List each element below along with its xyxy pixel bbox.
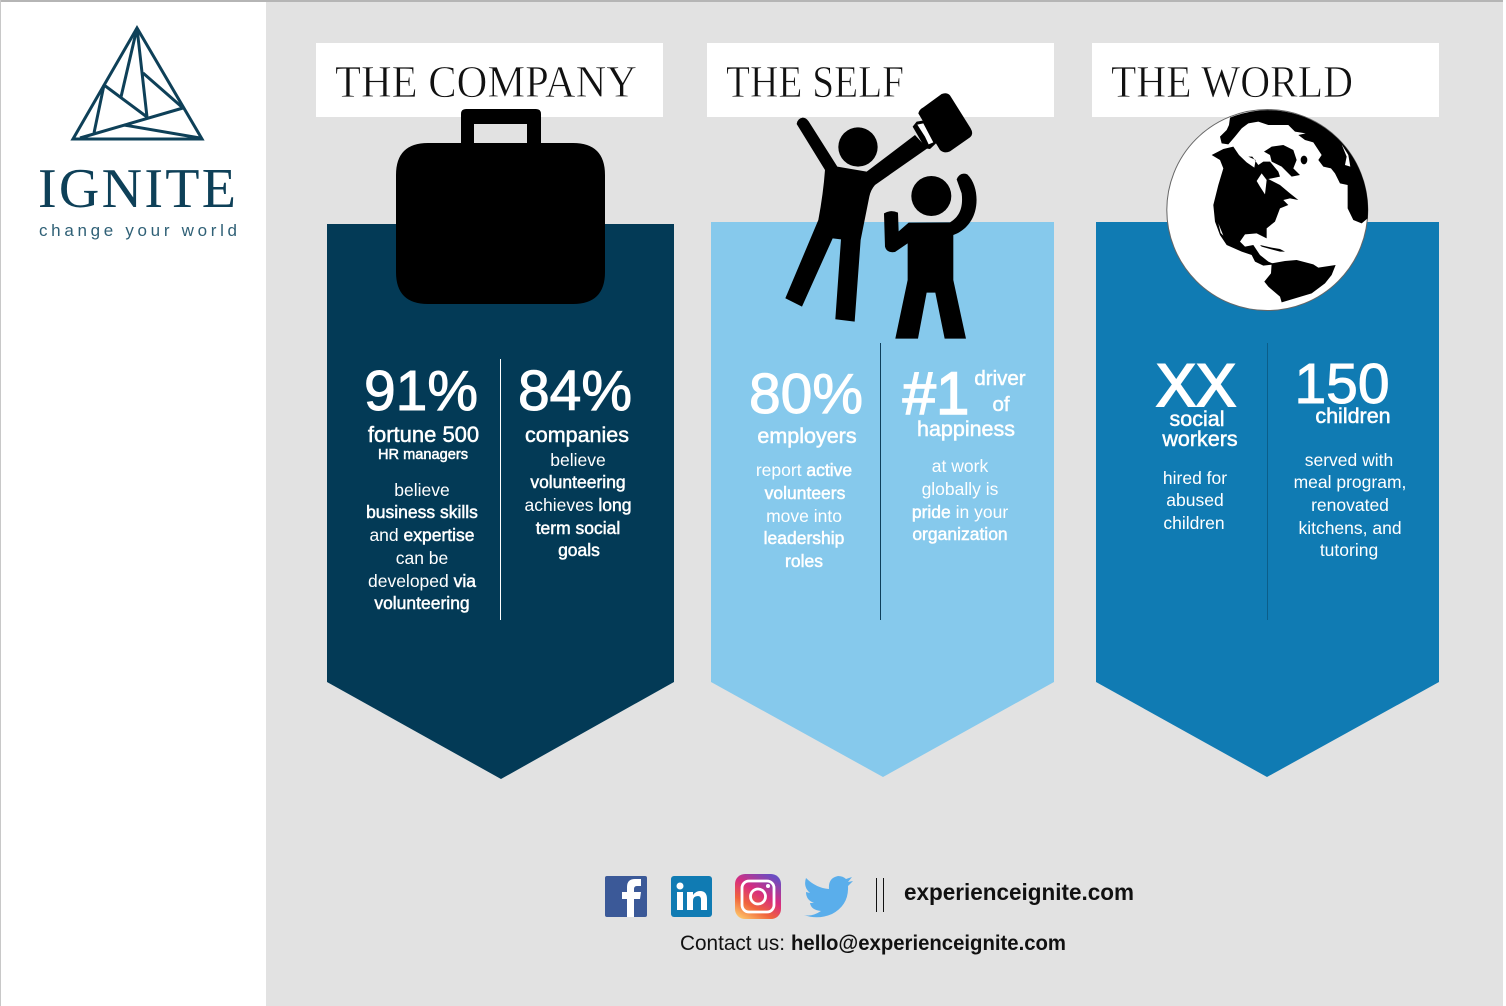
stat: 91% [364, 359, 479, 613]
stat: #1 driver of happiness: #1 [903, 360, 969, 427]
stat: 80%: roles [785, 551, 823, 571]
stat: XX: hired for [1163, 468, 1227, 488]
panel: the world [1092, 43, 1439, 777]
chevron background [711, 222, 1054, 777]
stat: 91%: HR managers [378, 447, 468, 463]
stat: 80%: volunteers [765, 483, 846, 503]
footer: social links and contact [605, 874, 1134, 955]
stat: 84%: goals [558, 540, 600, 560]
stat: 91%: and expertise [369, 525, 475, 545]
stat: 80%: employers [757, 424, 857, 448]
stat: XX: social [1170, 407, 1224, 431]
stat: XX: XX [1156, 352, 1236, 419]
stat: 80%: leadership [764, 528, 844, 548]
stat: 150: tutoring [1320, 540, 1378, 560]
heading: THE COMPANY [335, 57, 637, 107]
stat: XX: children [1163, 513, 1225, 533]
stat: 84%: companies [525, 423, 629, 447]
stat: 91%: 91% [364, 359, 478, 423]
stat: 91%: volunteering [374, 593, 470, 613]
stat: 80%: report active [756, 460, 852, 480]
heading: THE SELF [726, 57, 904, 107]
heading box [316, 43, 663, 117]
stat: 91%: business skills [366, 502, 478, 522]
stat: 91%: can be [396, 548, 448, 568]
stat: 84%: believe [550, 450, 606, 470]
panel: the company [316, 43, 674, 779]
chevron background [327, 224, 674, 779]
stat: 84%: volunteering [530, 472, 626, 492]
icon: twitter [804, 876, 853, 917]
icon: facebook [605, 876, 647, 917]
stat: XX [1156, 352, 1238, 533]
icon: faceted triangle [73, 28, 202, 139]
stat: XX: workers [1161, 427, 1238, 451]
stat: 80%: 80% [749, 362, 863, 426]
logo tagline: change your world [39, 221, 237, 240]
chevron background [1096, 222, 1439, 777]
heading box [1092, 43, 1439, 117]
stat: 150: served with [1305, 450, 1393, 470]
stat: 150: renovated [1311, 495, 1389, 515]
stat: 150: 150 [1294, 352, 1390, 416]
stat: 150 [1294, 352, 1406, 560]
stat: #1 driver of happiness: at work [932, 456, 988, 476]
stat: #1 driver of happiness [903, 360, 1026, 544]
logo: Ignite [38, 28, 237, 240]
logo wordmark: IGNITE [38, 158, 236, 220]
contact: Contact us: [680, 932, 785, 955]
stat: 91%: fortune 500 [368, 422, 479, 447]
stat: #1 driver of happiness: of [992, 393, 1010, 416]
icon: instagram [735, 874, 781, 919]
panel: the self [707, 43, 1054, 777]
stat: 84%: term social [536, 518, 620, 538]
stat: 150: kitchens, and [1298, 518, 1402, 538]
separator [876, 878, 884, 912]
contact [680, 932, 1066, 955]
stat: 150: meal program, [1294, 472, 1406, 492]
divider [1267, 343, 1268, 620]
stat: 84% [518, 359, 632, 560]
divider [880, 343, 881, 620]
stat: 80% [749, 362, 863, 571]
contact: hello@experienceignite.com [791, 932, 1066, 955]
heading: THE WORLD [1111, 57, 1353, 107]
stat: #1 driver of happiness: globally is [922, 479, 999, 499]
stat: #1 driver of happiness: happiness [917, 417, 1015, 441]
stat: #1 driver of happiness: pride in your [912, 502, 1008, 522]
icon: two people with briefcase [785, 93, 977, 339]
stat: #1 driver of happiness: driver [974, 367, 1026, 390]
stat: #1 driver of happiness: organization [912, 524, 1008, 544]
icon: briefcase [396, 109, 605, 304]
stat: 91%: developed via [368, 571, 476, 591]
heading box [707, 43, 1054, 117]
website: experienceignite.com [904, 879, 1134, 905]
stat: 84%: achieves long [524, 495, 632, 515]
divider [500, 359, 501, 620]
icon: linkedin [671, 876, 712, 917]
stat: 84%: 84% [518, 359, 632, 423]
stat: 91%: believe [394, 480, 450, 500]
stat: 150: children [1315, 404, 1391, 428]
stat: 80%: move into [766, 506, 842, 526]
stat: XX: abused [1166, 490, 1224, 510]
icon: globe [1167, 110, 1368, 310]
